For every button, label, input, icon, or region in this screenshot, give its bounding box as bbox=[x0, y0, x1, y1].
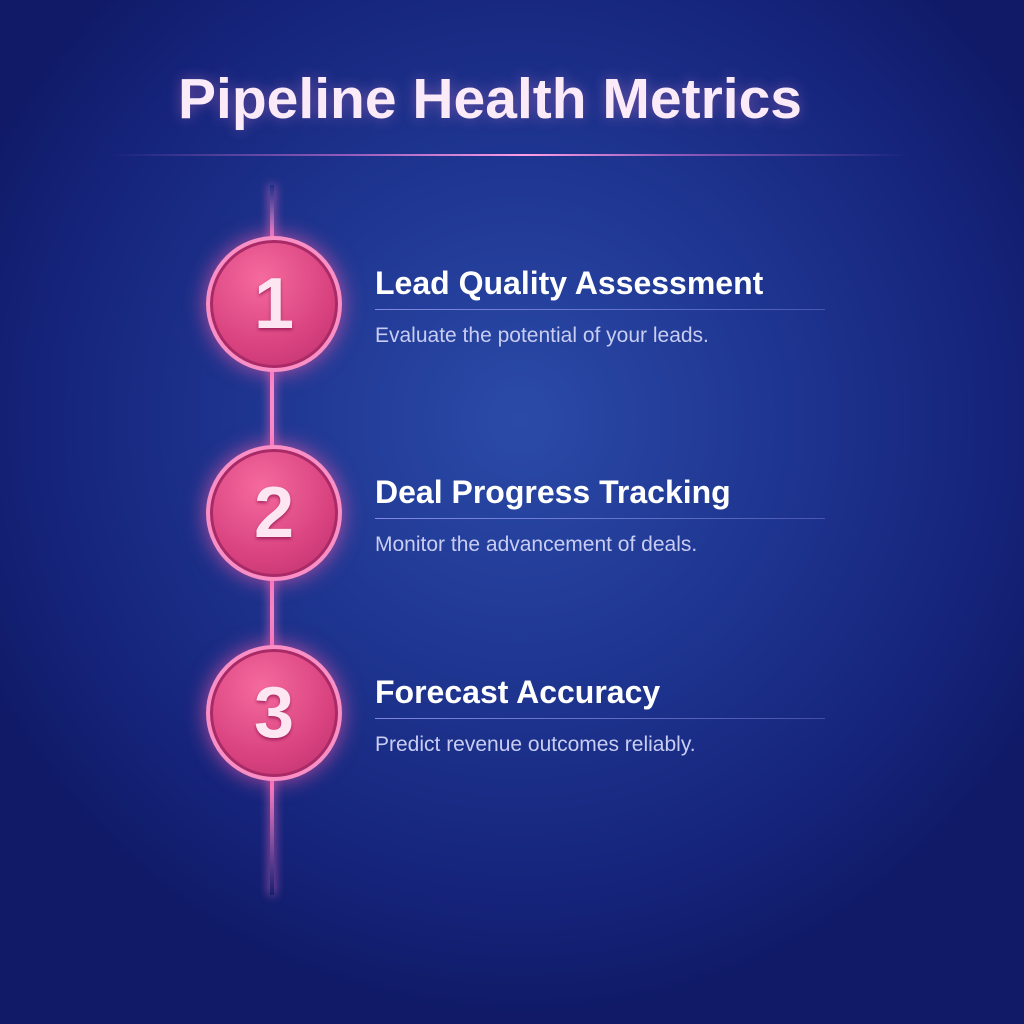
step 3 badge bbox=[206, 645, 342, 781]
step 2 badge bbox=[206, 445, 342, 581]
step 3 text bbox=[375, 674, 825, 756]
step 2 text: Deal Progress Tracking bbox=[375, 474, 731, 510]
step 1 text bbox=[375, 265, 825, 347]
step 1 badge bbox=[206, 236, 342, 372]
step 3 text: Predict revenue outcomes reliably. bbox=[375, 733, 696, 756]
step 1 badge: 1 bbox=[254, 264, 294, 344]
step 1 text: Evaluate the potential of your leads. bbox=[375, 324, 709, 347]
step 2 text: Monitor the advancement of deals. bbox=[375, 533, 697, 556]
step 3 text: Forecast Accuracy bbox=[375, 674, 660, 710]
timeline line bbox=[270, 185, 274, 895]
title: Pipeline Health Metrics bbox=[178, 67, 802, 131]
step 3 badge: 3 bbox=[254, 673, 294, 753]
step 1 text: Lead Quality Assessment bbox=[375, 265, 763, 301]
step 2 badge: 2 bbox=[254, 473, 294, 553]
step 2 text bbox=[375, 474, 825, 556]
